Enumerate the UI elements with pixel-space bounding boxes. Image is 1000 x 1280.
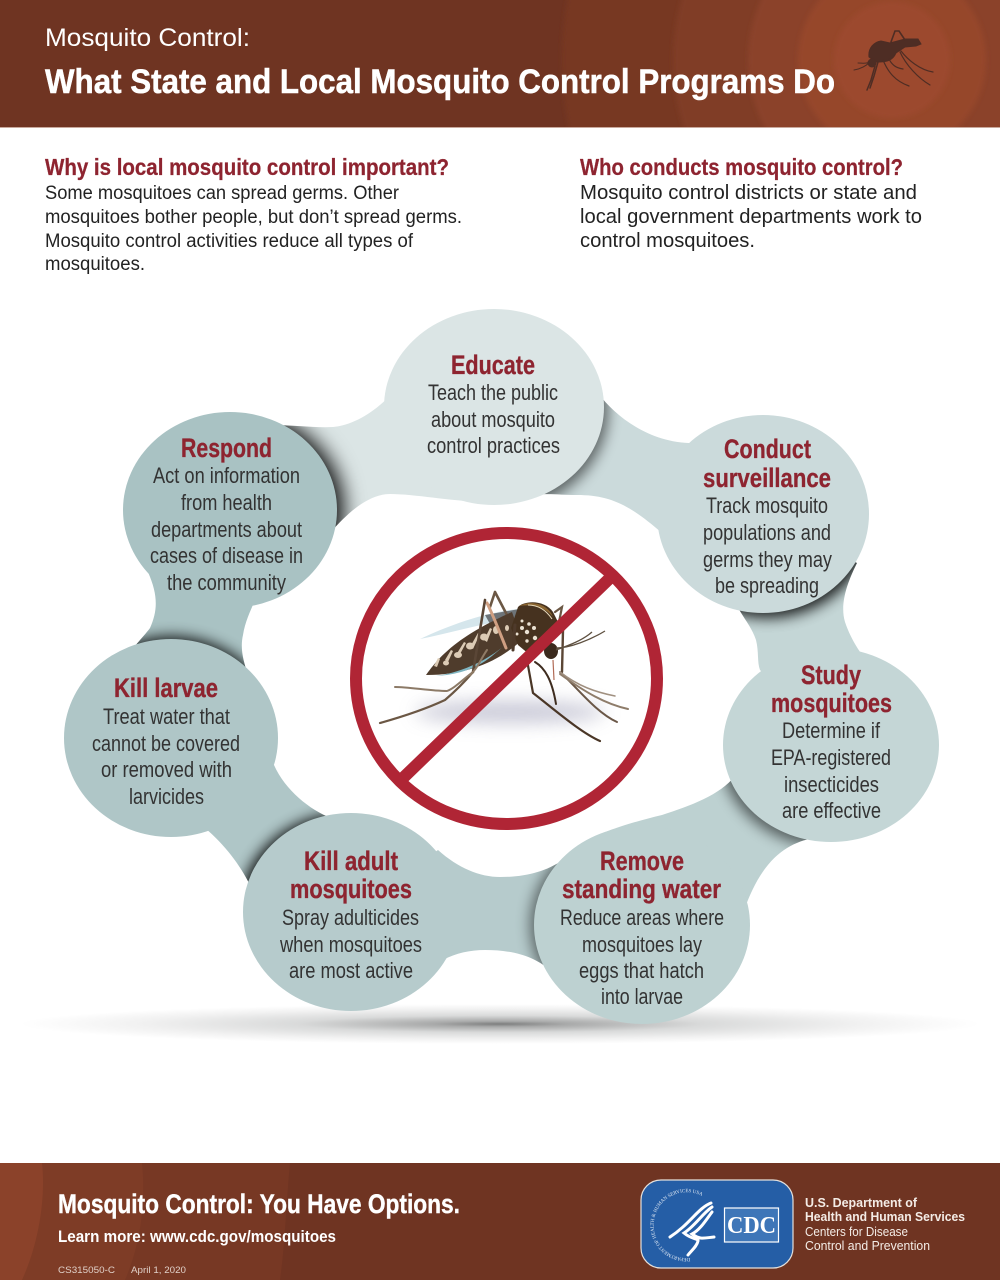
floor shadow <box>20 1004 980 1044</box>
footer link: Learn more: www.cdc.gov/mosquitoes <box>58 1227 336 1246</box>
CDC box: CDC <box>727 1213 776 1239</box>
panel: educate: Educate <box>451 350 535 380</box>
panel: respond: from health <box>181 490 272 515</box>
panel: kill adult mosquitoes <box>243 813 459 1011</box>
text block: why local control is important: mosquitoes. <box>45 254 145 275</box>
footer banner <box>0 1163 1000 1280</box>
panel: conduct surveillance: Track mosquito <box>706 493 828 518</box>
panel: respond <box>123 412 337 608</box>
panel: conduct surveillance: Conduct <box>724 434 811 464</box>
text block: who conducts control: Who conducts mosquito control? <box>580 154 903 180</box>
header title: What State and Local Mosquito Control Programs Do <box>45 63 835 101</box>
panel: kill larvae: cannot be covered <box>92 731 240 756</box>
panel: study mosquitoes: insecticides <box>784 772 879 797</box>
connector: educate to surveillance <box>544 400 689 530</box>
panel: kill adult mosquitoes: mosquitoes <box>290 874 412 904</box>
text block: who conducts control: Mosquito control districts or state and <box>580 182 917 204</box>
mosquito wing <box>420 608 530 639</box>
panel: remove standing water: standing water <box>562 874 721 904</box>
text block: who conducts control <box>580 154 922 252</box>
panel: respond: Respond <box>181 433 272 463</box>
panel: kill adult mosquitoes: Spray adulticides <box>282 905 419 930</box>
panel: kill larvae <box>64 639 278 837</box>
text block: who conducts control: local government departments work to <box>580 206 922 228</box>
panel: educate <box>384 309 604 505</box>
text block: why local control is important: Why is local mosquito control important? <box>45 154 449 180</box>
panel: remove standing water: mosquitoes lay <box>582 932 702 957</box>
agency names: U.S. Department of <box>805 1196 918 1210</box>
mosquito abdomen <box>426 612 522 675</box>
panel: educate: control practices <box>427 433 560 458</box>
connector: larvae to respond <box>136 574 252 667</box>
mosquito near legs <box>380 600 628 741</box>
panel: kill larvae: Kill larvae <box>114 673 218 703</box>
connector: surveillance to study <box>740 562 860 671</box>
panel: conduct surveillance: be spreading <box>715 573 819 598</box>
connector: adults to larvae <box>208 765 326 882</box>
text block: why local control is important: Mosquito control activities reduce all types of <box>45 231 414 252</box>
panel: respond: Act on information <box>153 463 300 488</box>
panel: remove standing water: Reduce areas where <box>560 905 724 930</box>
logo: HHS and CDC <box>640 1179 794 1269</box>
icon: HHS eagle <box>670 1203 714 1255</box>
mosquito head and antennae <box>544 643 558 659</box>
icon: prohibition sign <box>356 533 657 824</box>
agency names <box>805 1196 965 1253</box>
panel: study mosquitoes: Determine if <box>782 718 881 743</box>
panel: kill adult mosquitoes: Kill adult <box>304 846 398 876</box>
panel: respond: cases of disease in <box>150 543 303 568</box>
panel: study mosquitoes: EPA-registered <box>771 745 891 770</box>
text block: why local control is important: mosquitoes bother people, but don’t spread germs. <box>45 207 462 228</box>
panel: respond: the community <box>167 570 286 595</box>
panel: respond: departments about <box>151 517 302 542</box>
panel: educate: Teach the public <box>428 380 558 405</box>
footer heading: Mosquito Control: You Have Options. <box>58 1189 460 1219</box>
agency names: Centers for Disease <box>805 1225 908 1239</box>
panel: study mosquitoes: Study <box>801 660 861 690</box>
icon: HHS seal text <box>654 1192 708 1258</box>
agency names: Control and Prevention <box>805 1239 930 1253</box>
panel: remove standing water <box>534 826 750 1024</box>
panel: conduct surveillance: germs they may <box>703 547 832 572</box>
panel: remove standing water: eggs that hatch <box>579 958 704 983</box>
icon: mosquito silhouette <box>854 31 933 90</box>
footer publication id: CS315050-C <box>58 1265 115 1276</box>
illustration: mosquito <box>380 592 628 741</box>
text block: why local control is important: Some mosquitoes can spread germs. Other <box>45 183 400 204</box>
connector: study to standing water <box>606 780 807 902</box>
logo: HHS and CDC: DEPARTMENT OF HEALTH & HUMAN SERVICES USA <box>650 1188 702 1262</box>
panel: remove standing water: Remove <box>600 846 684 876</box>
panel: study mosquitoes: are effective <box>782 798 881 823</box>
mosquito far legs <box>490 592 563 672</box>
panel: kill larvae: Treat water that <box>103 704 230 729</box>
text block: why local control is important <box>45 154 462 275</box>
connector: standing water to adults <box>436 850 558 965</box>
panel: kill adult mosquitoes: when mosquitoes <box>279 932 422 957</box>
panel: study mosquitoes: mosquitoes <box>771 688 892 718</box>
mosquito thorax <box>511 602 558 655</box>
panel: conduct surveillance: populations and <box>703 520 831 545</box>
footer date: April 1, 2020 <box>131 1265 186 1276</box>
agency names: Health and Human Services <box>805 1210 965 1224</box>
connector: respond to educate <box>283 402 462 528</box>
panel: conduct surveillance: surveillance <box>703 463 831 493</box>
panel: kill larvae: larvicides <box>129 784 204 809</box>
text block: who conducts control: control mosquitoes. <box>580 230 755 252</box>
panel: kill adult mosquitoes: are most active <box>289 958 413 983</box>
panel: conduct surveillance <box>657 415 869 613</box>
header banner <box>0 0 1000 128</box>
header kicker: Mosquito Control: <box>45 24 250 52</box>
panel: educate: about mosquito <box>431 407 555 432</box>
panel: kill larvae: or removed with <box>101 757 232 782</box>
mosquito cast shadow <box>415 701 605 723</box>
panel: study mosquitoes <box>723 648 939 842</box>
panel: remove standing water: into larvae <box>601 984 683 1009</box>
